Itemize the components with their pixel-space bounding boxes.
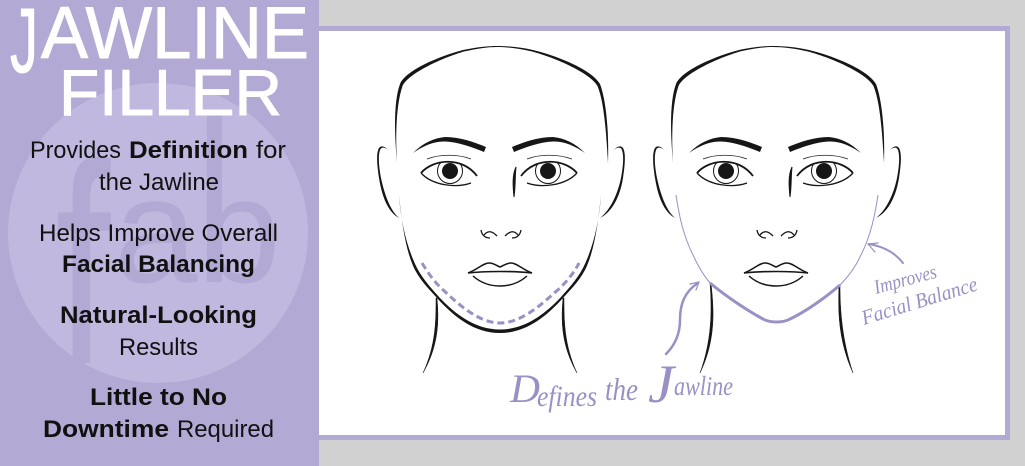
benefits list bbox=[30, 137, 286, 443]
benefit: definition: Provides bbox=[30, 137, 121, 164]
label: defines the jawline: the bbox=[605, 371, 638, 407]
benefit: definition: Definition bbox=[129, 137, 248, 164]
panel: benefits sidebar bbox=[0, 0, 319, 466]
dashed jawline bbox=[422, 263, 579, 323]
label: defines the jawline: efines bbox=[537, 380, 597, 413]
label: defines the jawline: J bbox=[648, 354, 677, 414]
label: improves: Improves bbox=[871, 261, 939, 299]
jaw outline bbox=[399, 195, 601, 333]
logo watermark: ab bbox=[114, 146, 281, 314]
benefit: facial balancing: Helps Improve Overall bbox=[39, 220, 278, 247]
face: after, with purple jawline bbox=[653, 46, 901, 373]
purple jaw outline bbox=[676, 195, 710, 283]
neck lines bbox=[423, 298, 577, 373]
title: FILLER bbox=[59, 56, 282, 129]
benefits list: Required bbox=[177, 416, 274, 443]
benefits list: Downtime bbox=[43, 416, 169, 443]
benefit: little downtime: Little to No bbox=[90, 384, 227, 411]
label: facial balance: Facial Balance bbox=[858, 272, 980, 330]
benefits list: Facial Balancing bbox=[62, 251, 255, 278]
benefit: natural-looking results: Natural-Looking bbox=[60, 302, 257, 329]
panel: illustration frame bbox=[314, 28, 1008, 438]
face: before, with dashed jawline bbox=[377, 46, 625, 373]
title bbox=[10, 0, 309, 129]
benefits list: Results bbox=[119, 334, 198, 361]
label: defines the jawline: awline bbox=[674, 371, 733, 401]
logo watermark bbox=[8, 83, 308, 424]
arrow: improves facial balance bbox=[868, 243, 903, 263]
logo watermark: f bbox=[55, 106, 111, 424]
label: defines the jawline: D bbox=[509, 366, 540, 411]
benefits list: the Jawline bbox=[99, 169, 219, 196]
neck lines bbox=[700, 283, 853, 373]
benefit: definition: for bbox=[256, 137, 286, 164]
arrow: defines the jawline bbox=[666, 282, 699, 354]
